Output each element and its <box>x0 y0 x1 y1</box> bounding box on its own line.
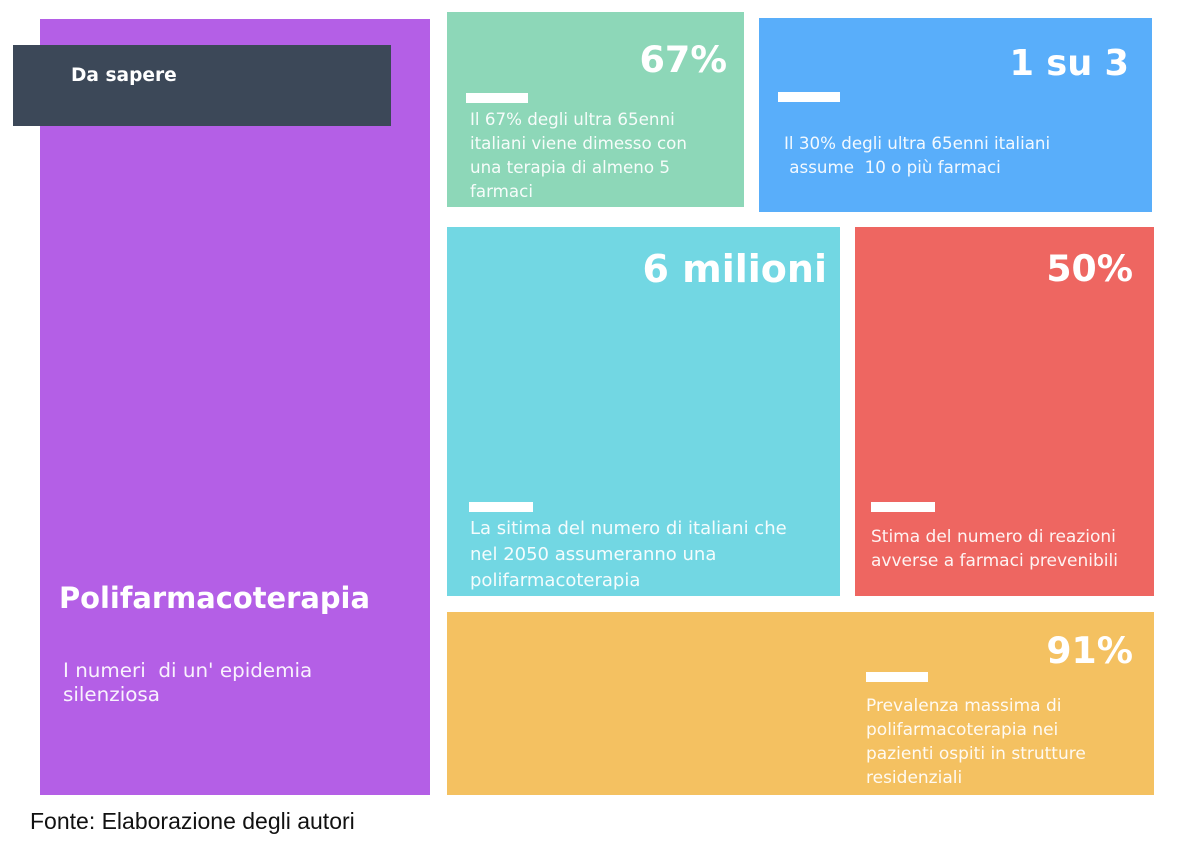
panel: 1 su 3 <box>759 18 1152 212</box>
subtitle: silenziosa <box>63 683 160 706</box>
subtitle <box>63 659 312 706</box>
panel: 67% <box>447 12 744 207</box>
panel: 50% <box>855 227 1154 596</box>
description <box>784 133 1050 177</box>
description: una terapia di almeno 5 <box>470 157 670 177</box>
description: polifarmacoterapia nei <box>866 720 1058 740</box>
description: Il 67% degli ultra 65enni <box>470 109 675 129</box>
description: residenziali <box>866 768 962 788</box>
description: nel 2050 assumeranno una <box>470 544 716 565</box>
description <box>470 109 687 201</box>
banner: Da sapere <box>13 45 391 126</box>
description: Prevalenza massima di <box>866 696 1062 716</box>
panel: 6 milioni <box>447 227 840 596</box>
stat: 50%: 50% <box>1046 247 1133 290</box>
description: avverse a farmaci prevenibili <box>871 551 1118 571</box>
panel: 91% <box>447 612 1154 795</box>
description: Stima del numero di reazioni <box>871 527 1116 547</box>
stat: 6 milioni: 6 milioni <box>642 247 827 291</box>
divider bar <box>866 672 928 682</box>
banner label: Da sapere <box>71 65 177 86</box>
subtitle: I numeri di un' epidemia <box>63 659 312 682</box>
divider bar <box>871 502 935 512</box>
description: La sitima del numero di italiani che <box>470 518 787 539</box>
divider bar <box>466 93 528 103</box>
description: assume 10 o più farmaci <box>789 157 1001 177</box>
stat: 91%: 91% <box>1046 629 1133 672</box>
description: Il 30% degli ultra 65enni italiani <box>784 133 1050 153</box>
description <box>470 518 787 591</box>
description <box>866 696 1086 788</box>
description: farmaci <box>470 181 533 201</box>
source note: Fonte: Elaborazione degli autori <box>30 808 355 834</box>
description: pazienti ospiti in strutture <box>866 744 1086 764</box>
divider bar <box>469 502 533 512</box>
description <box>871 527 1118 571</box>
divider bar <box>778 92 840 102</box>
heading: Polifarmacoterapia: Polifarmacoterapia <box>59 581 370 615</box>
description: polifarmacoterapia <box>470 570 640 591</box>
stat: 67%: 67% <box>639 38 727 81</box>
stat: 1 su 3: 1 su 3 <box>1010 43 1129 84</box>
description: italiani viene dimesso con <box>470 133 687 153</box>
panel: Polifarmacoterapia <box>40 19 430 795</box>
